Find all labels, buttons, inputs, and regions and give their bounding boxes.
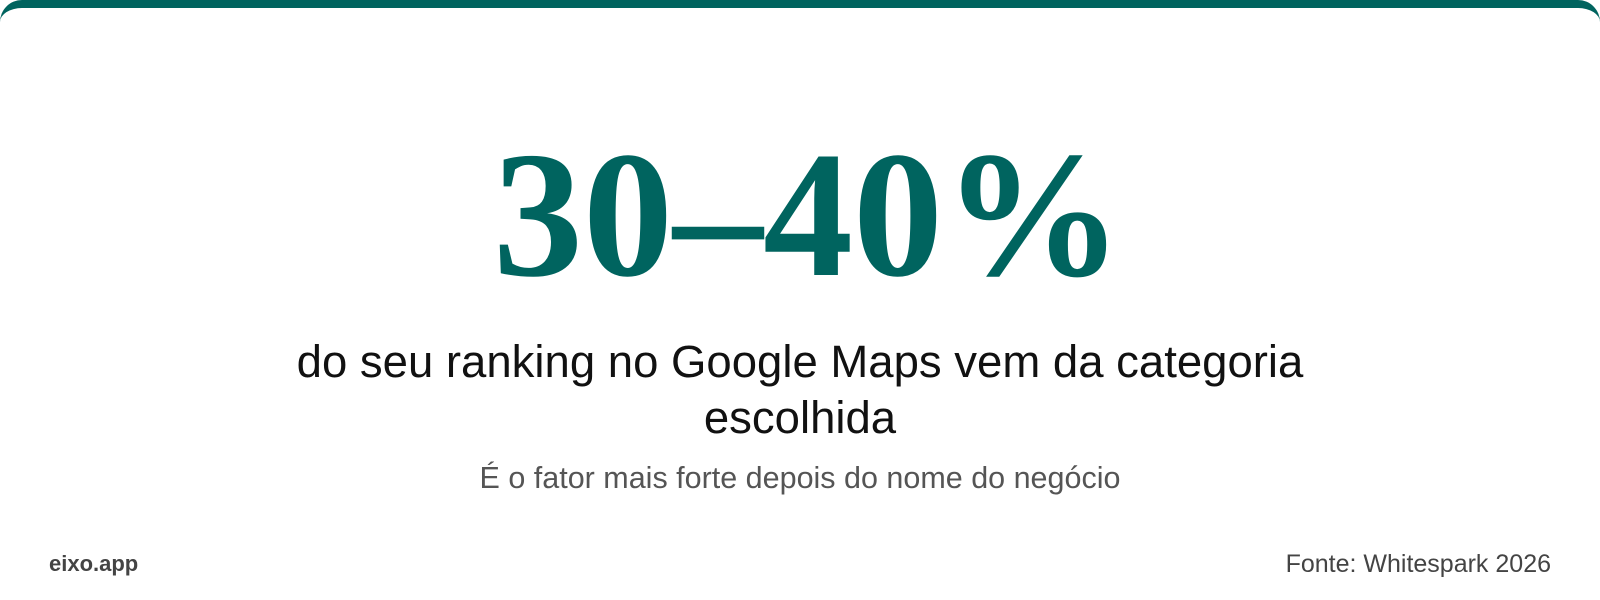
source: Fonte: Whitespark 2026 (1286, 550, 1551, 578)
subtitle (297, 336, 1304, 443)
brand: eixo.app (49, 551, 138, 576)
headline number: 30–40% (493, 115, 1123, 314)
subtitle: do seu ranking no Google Maps vem da categoria (297, 336, 1303, 387)
subtitle: escolhida (704, 392, 896, 443)
note text: É o fator mais forte depois do nome do negócio (480, 461, 1120, 495)
